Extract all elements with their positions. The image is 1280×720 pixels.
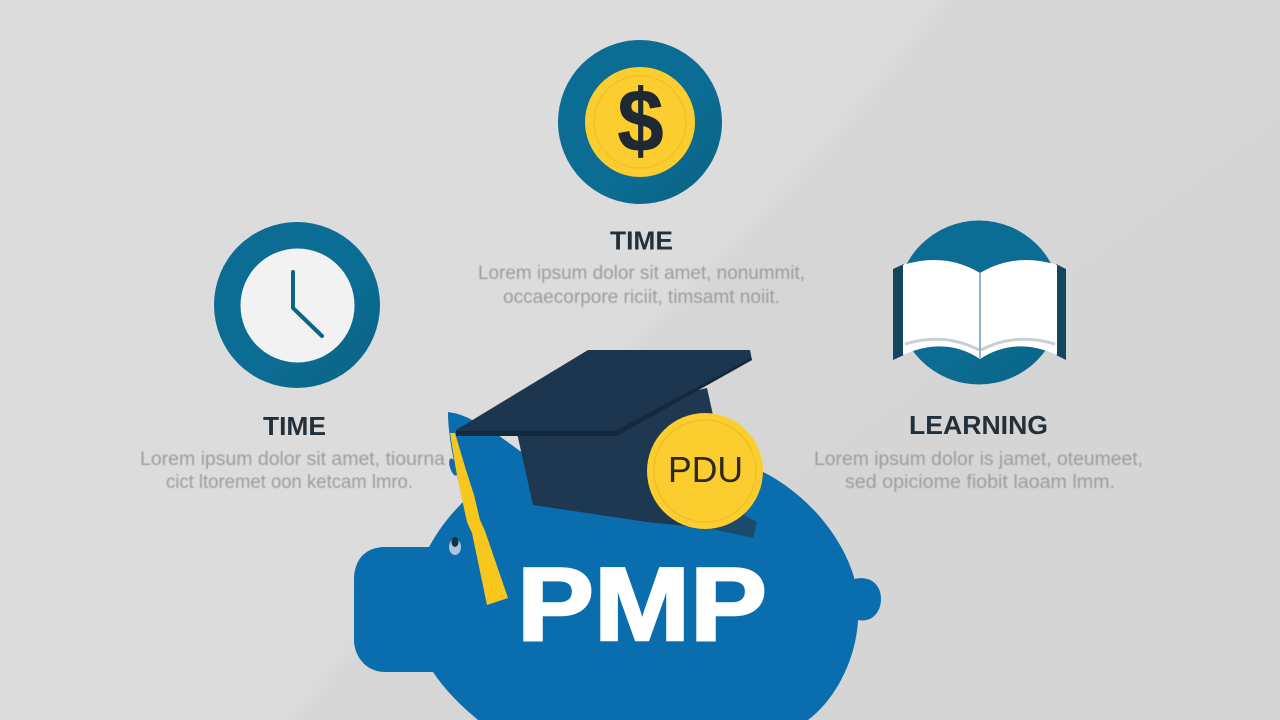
icon: dollar coin <box>558 40 722 204</box>
graduation cap <box>447 350 757 605</box>
piggy bank with PMP label <box>354 412 881 720</box>
label: PDU: PDU <box>668 449 743 490</box>
text block: left description: Lorem ipsum dolor sit amet, tiourna <box>140 449 445 470</box>
text block: center description: Lorem ipsum dolor sit amet, nonummit, <box>478 263 805 284</box>
icon: clock <box>214 222 380 388</box>
icon: PDU coin <box>647 413 763 529</box>
heading: left time: TIME <box>263 411 326 441</box>
heading: learning: LEARNING <box>909 410 1048 440</box>
text block: right description: Lorem ipsum dolor is jamet, oteumeet, <box>814 449 1143 470</box>
icon: dollar coin: $ <box>618 71 664 170</box>
label: PMP: PMP <box>517 547 767 663</box>
text block: left description: cict ltoremet oon ketcam lmro. <box>166 472 413 493</box>
text block: center description: occaecorpore riciit, timsamt noiit. <box>503 287 780 308</box>
text block: right description <box>814 449 1143 493</box>
eye <box>449 537 461 555</box>
tassel <box>450 433 508 605</box>
text block: left description <box>140 449 445 493</box>
icon: open book <box>893 220 1066 384</box>
heading: center time: TIME <box>610 226 673 256</box>
small tassel loop <box>447 457 460 477</box>
text block: right description: sed opiciome fiobit laoam lmm. <box>845 472 1115 493</box>
text block: center description <box>478 263 805 308</box>
